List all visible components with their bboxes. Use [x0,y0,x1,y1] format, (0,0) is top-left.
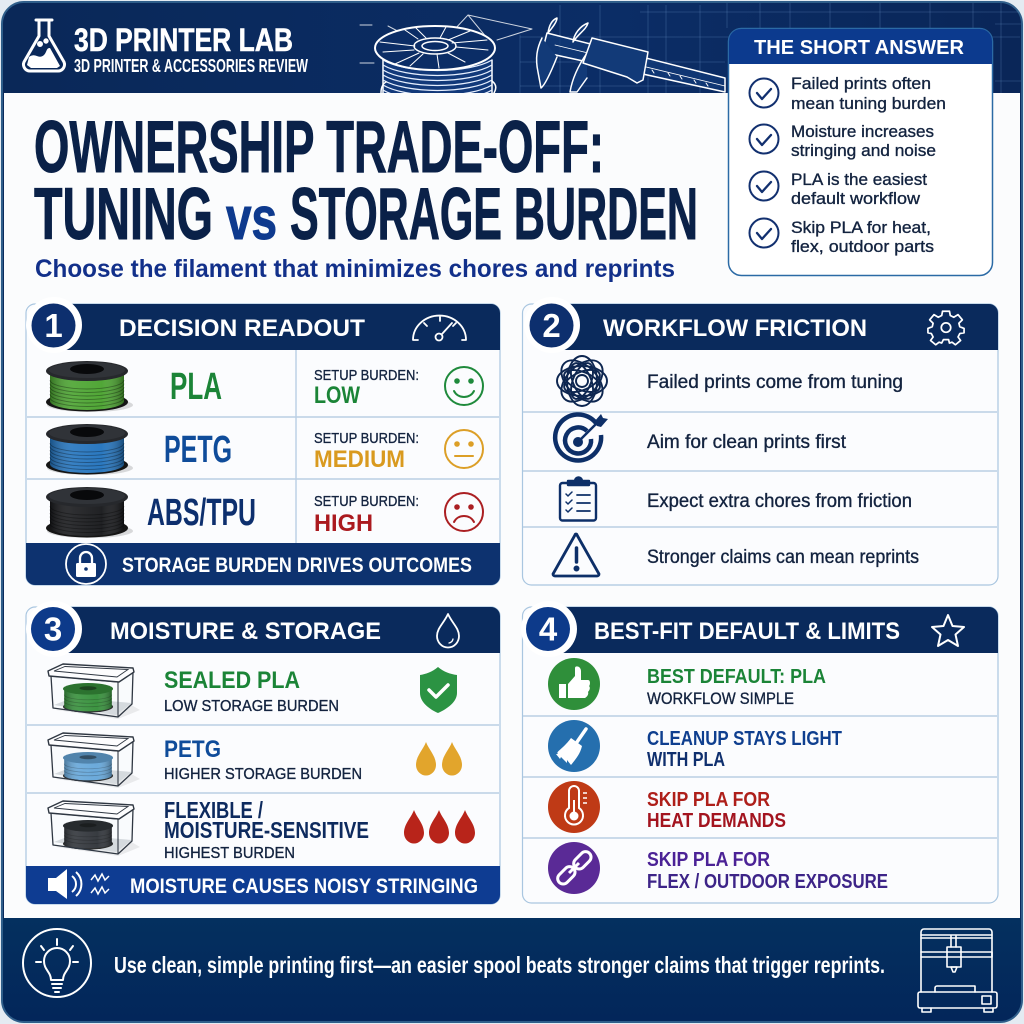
icon: light bulb [23,929,91,997]
row: target [555,414,847,460]
row: warning: Stronger claims can mean reprints [647,547,919,568]
row: best default: WORKFLOW SIMPLE [647,689,794,708]
row: PETG: MEDIUM [314,446,405,473]
title: vs [226,185,277,252]
panel 3 heading [26,601,500,657]
icon: flask logo [23,20,64,71]
row: cleanup: CLEANUP STAYS LIGHT [647,728,842,750]
title [34,107,698,255]
row: sealed PLA: LOW STORAGE BURDEN [164,698,339,715]
icon: 3D printer [918,929,997,1012]
illustration: caliper blueprint [537,18,725,92]
row: warning [553,534,919,576]
row: PETG: PETG [164,429,232,471]
header band [3,3,1021,100]
panel 1: decision readout [26,297,500,585]
row: PLA: LOW [314,382,360,409]
panel 2: workflow friction [522,297,998,585]
page body background [4,93,1020,918]
check item 3: PLA is the easiest [791,170,927,189]
row: clipboard: Expect extra chores from friction [647,491,912,512]
icon: green shield [420,667,457,713]
brand name: 3D PRINTER LAB [74,22,293,58]
row: PETG: SETUP BURDEN: [314,430,419,447]
row: best default: BEST DEFAULT: PLA [647,666,826,688]
check item 2 [750,122,936,160]
icon: speaker and noise [48,869,109,899]
short answer heading bar [729,29,992,64]
icon: neutral face [445,430,483,468]
check item 2: Moisture increases [791,122,934,141]
row: flexible storage: FLEXIBLE / [164,797,263,823]
row: sealed PLA: SEALED PLA [164,667,300,694]
icon: star [932,615,964,646]
icon: gauge [413,316,466,340]
panel 3 footer strip: MOISTURE CAUSES NOISY STRINGING [130,875,478,898]
row: PLA [46,361,483,412]
row: best default [548,658,826,710]
title: STORAGE BURDEN [290,174,698,255]
icon: thumbs up [548,658,600,710]
panel 3 footer strip [26,866,500,904]
dividers [523,716,997,838]
icon: lock [66,544,106,584]
illustration: filament spool blueprint [360,15,532,100]
icon: target [555,414,608,460]
row: PETG storage [48,733,462,788]
title: OWNERSHIP TRADE-OFF: [34,107,604,188]
row: PLA: SETUP BURDEN: [314,367,419,384]
panel 4 heading: BEST-FIT DEFAULT & LIMITS [594,618,900,645]
row: ABS/TPU: SETUP BURDEN: [314,493,419,510]
panel 1 heading: 1 [44,307,63,344]
row: tangle [554,353,903,409]
row: flex and outdoor: SKIP PLA FOR [647,849,770,871]
row: PETG [46,424,483,475]
row: ABS/TPU [46,487,483,538]
icon: warning triangle [553,534,599,576]
panel 3: moisture and storage [26,601,500,904]
row: sealed PLA [48,664,457,719]
panel 2 heading: 2 [542,307,561,344]
row: flexible storage [48,797,475,862]
row: flex and outdoor [548,842,888,894]
row: PLA: PLA [170,366,222,408]
icon: gear [928,311,964,345]
row: flexible storage: HIGHEST BURDEN [164,845,295,862]
dividers [523,412,997,527]
check item 1: mean tuning burden [791,94,946,113]
panel: the short answer [728,28,992,276]
panel 4 heading: 4 [539,610,558,648]
subtitle: Choose the filament that minimizes chores and reprints [35,255,675,283]
row: flex and outdoor: FLEX / OUTDOOR EXPOSURE [647,871,888,893]
row: tangle: Failed prints come from tuning [647,372,903,393]
row: cleanup: WITH PLA [647,749,725,771]
icon: happy face [445,367,483,405]
title: TUNING [34,174,213,255]
check item 1: Failed prints often [791,74,931,93]
check item 1 [750,74,946,113]
row: heat: HEAT DEMANDS [647,810,786,832]
dividers [27,725,499,793]
row: target: Aim for clean prints first [647,432,847,453]
row: PETG storage: PETG [164,736,221,763]
dividers [27,350,499,543]
icon: thermometer [548,781,600,833]
check item 3 [750,170,927,208]
panel 1 heading [26,297,500,353]
panel 1 heading: DECISION READOUT [119,315,365,342]
icon: tangled filament [554,353,610,409]
icon: sad face [445,493,483,531]
panel 4: best-fit default and limits [521,601,998,903]
icon: water drop [437,614,459,648]
row: ABS/TPU: HIGH [314,510,373,537]
blueprint grid [520,3,1021,93]
panel 4 heading [521,601,998,657]
icon: two amber drops [416,742,462,776]
check item 4: Skip PLA for heat, [791,218,931,237]
panel 3 heading: 3 [44,610,62,648]
check item 4: flex, outdoor parts [791,237,934,256]
check item 2: stringing and noise [791,141,936,160]
icon: clipboard [560,478,596,520]
row: flexible storage: MOISTURE-SENSITIVE [164,817,369,843]
check item 4 [750,218,934,256]
row: heat [548,781,786,833]
icon: three red drops [404,810,475,844]
row: heat: SKIP PLA FOR [647,789,770,811]
brand tagline: 3D PRINTER & ACCESSORIES REVIEW [74,56,308,76]
check item 3: default workflow [791,189,921,208]
row: PETG storage: HIGHER STORAGE BURDEN [164,766,362,783]
footer band [3,918,1021,1021]
panel 2 heading [524,297,998,353]
row: ABS/TPU: ABS/TPU [147,492,256,534]
panel 1 footer strip [26,543,500,585]
row: clipboard [560,478,912,520]
panel 2 heading: WORKFLOW FRICTION [603,315,867,342]
panel 3 heading: MOISTURE & STORAGE [110,618,381,645]
icon: chain link [548,842,600,894]
panel 1 footer strip: STORAGE BURDEN DRIVES OUTCOMES [122,554,472,577]
row: cleanup [548,720,842,772]
short answer heading bar: THE SHORT ANSWER [754,37,965,59]
icon: broom [548,720,600,772]
